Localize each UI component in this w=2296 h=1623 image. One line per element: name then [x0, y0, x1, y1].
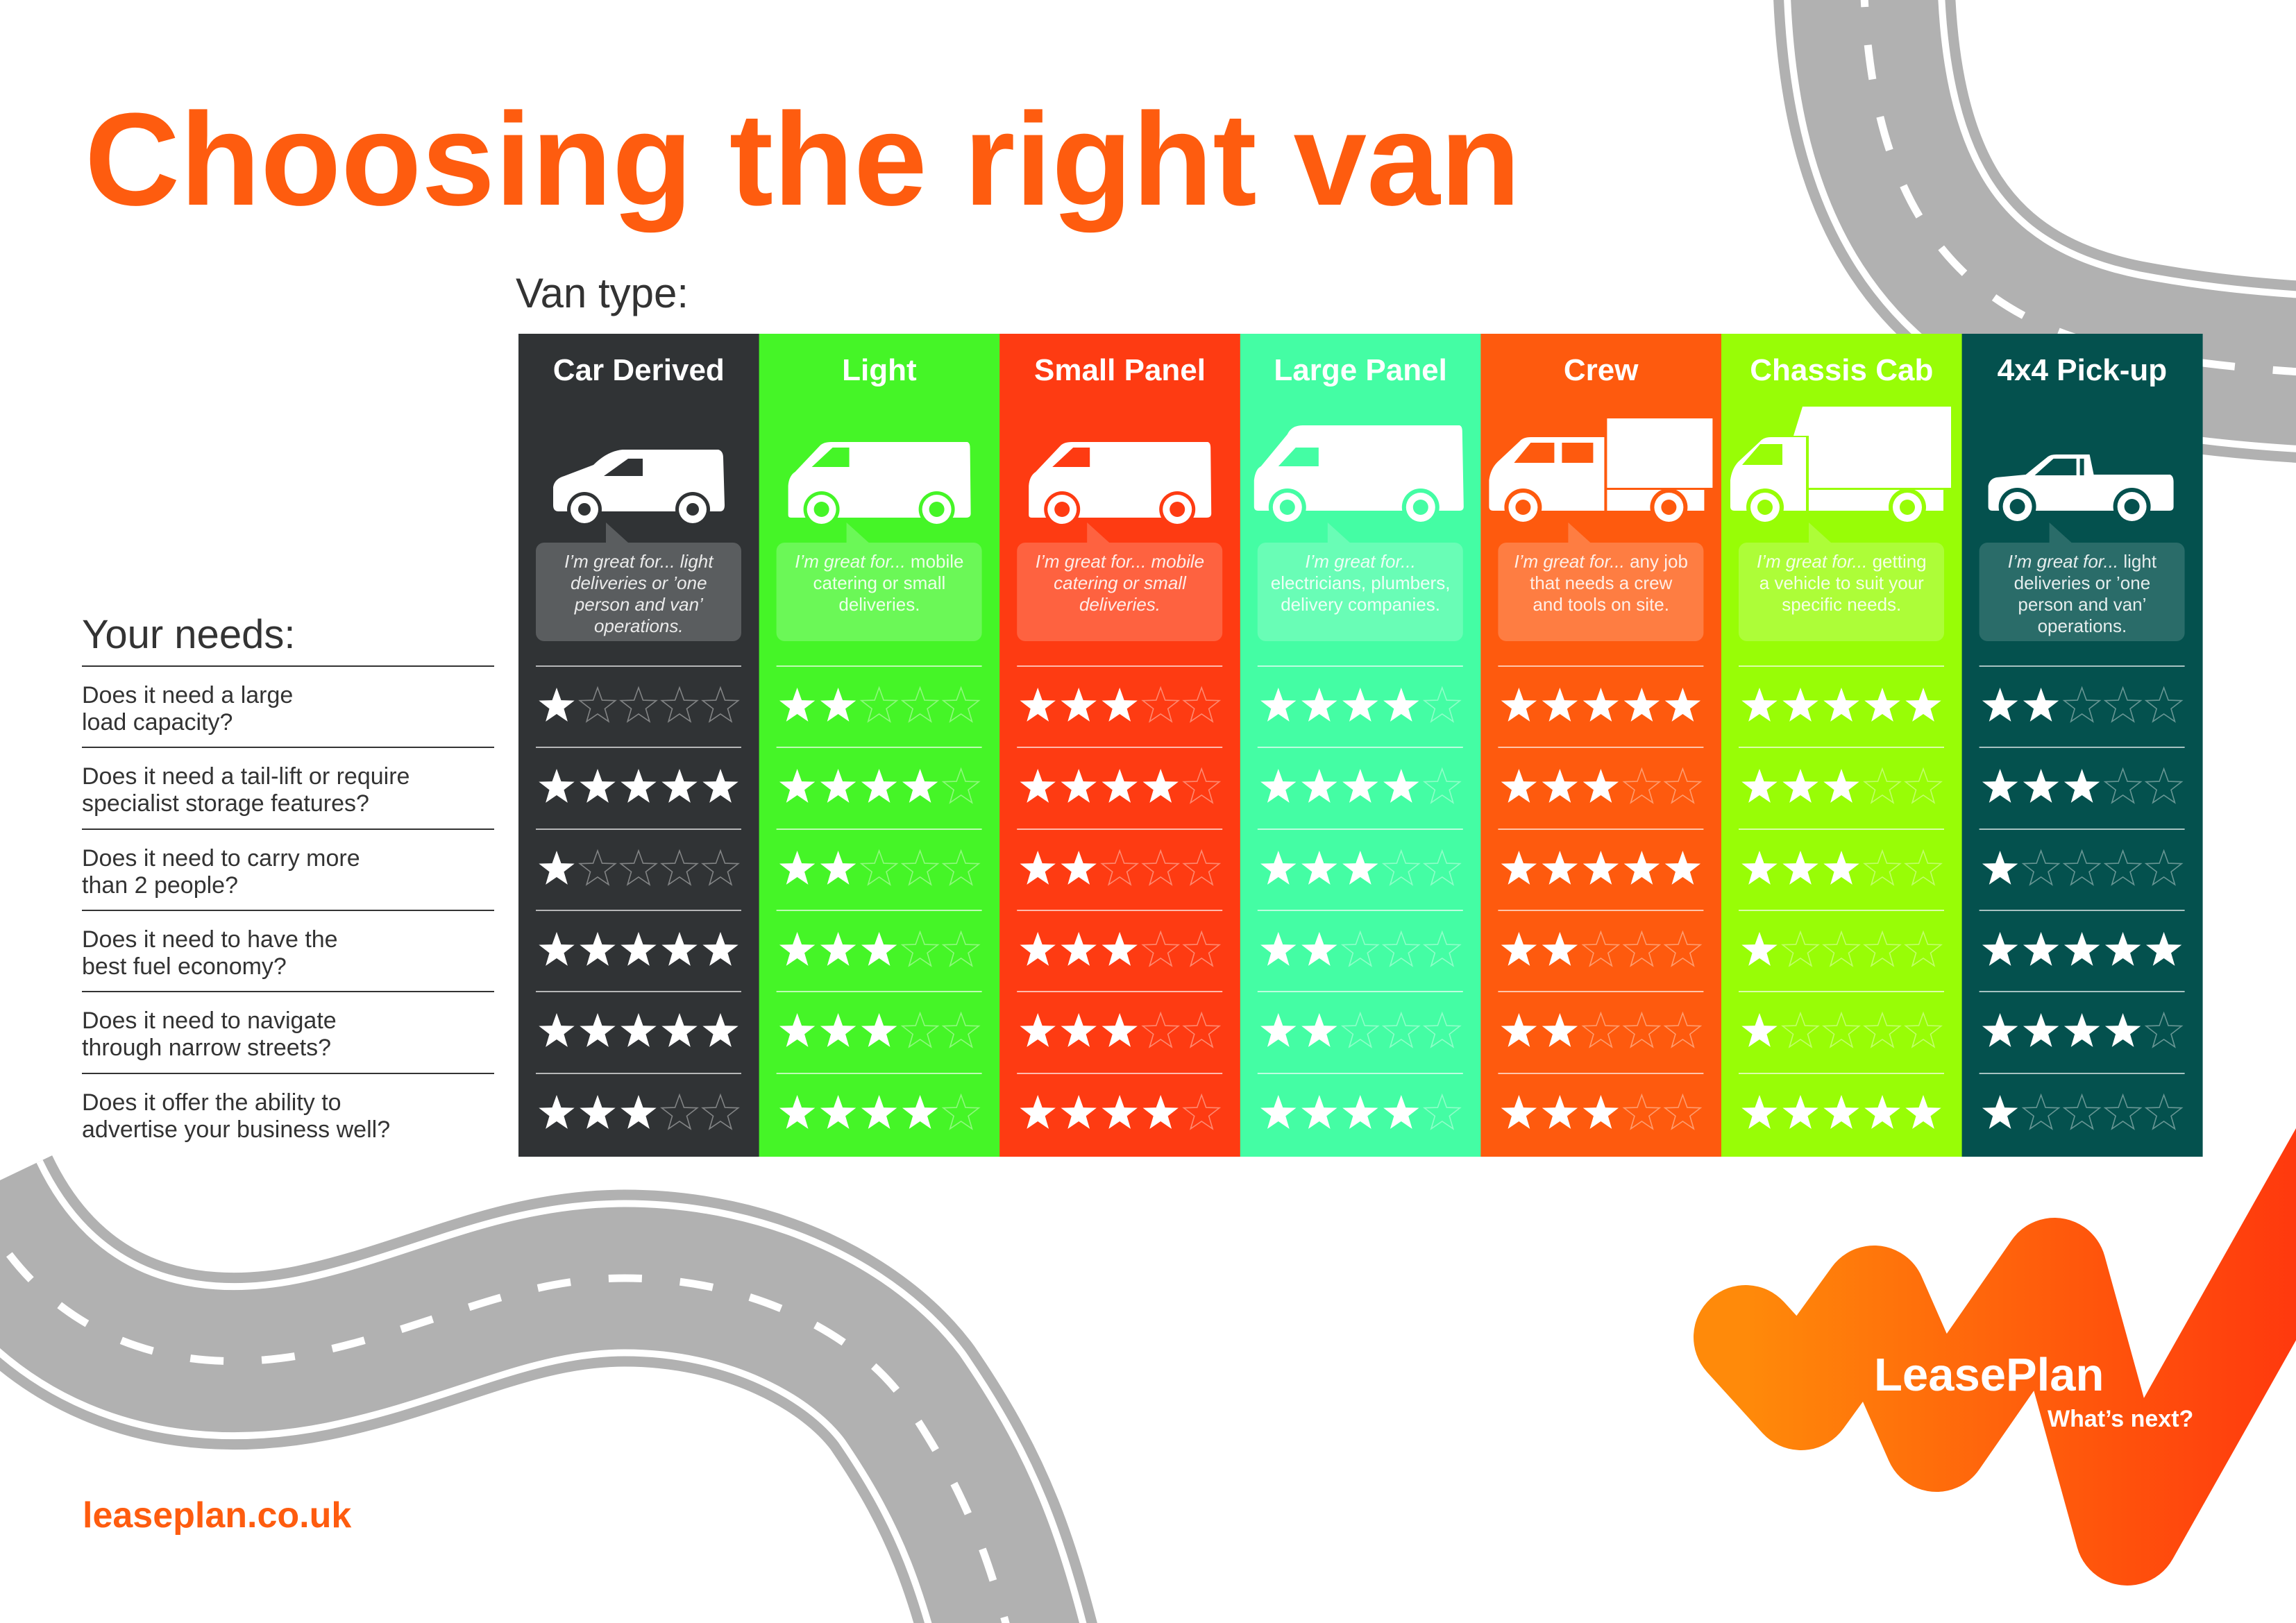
question 1: load capacity? — [82, 709, 233, 736]
callout: small panel: deliveries. — [1079, 594, 1160, 615]
callout: car derived — [536, 522, 741, 641]
panel: chassis cab: Chassis Cab — [1750, 353, 1933, 387]
road: top right — [1864, 0, 2296, 375]
question 5: Does it need to navigate — [82, 1008, 337, 1034]
callout: car derived: I’m great for... light — [564, 551, 713, 572]
panel: chassis cab — [1721, 334, 1962, 1157]
callout: light: I’m great for... mobile — [795, 551, 964, 572]
needs list — [82, 666, 494, 1143]
panel: large panel — [1240, 334, 1481, 1157]
icon: logo ribbon — [1746, 1096, 2296, 1533]
panel: large panel: Large Panel — [1274, 353, 1447, 387]
callout: pick-up: person and van’ — [2018, 594, 2146, 615]
panel: small panel: Small Panel — [1034, 353, 1206, 387]
logo: leaseplan — [1746, 1096, 2296, 1533]
callout: chassis cab: a vehicle to suit your — [1759, 572, 1924, 593]
icon: crew van — [1489, 418, 1712, 526]
panel: 4x4 pick-up — [1962, 334, 2203, 1157]
ratings: light — [779, 688, 979, 1129]
logo: leaseplan: LeasePlan — [1874, 1349, 2104, 1401]
callout: light: catering or small — [813, 572, 945, 593]
website url: leaseplan.co.uk — [83, 1495, 351, 1536]
callout: crew: that needs a crew — [1530, 572, 1673, 593]
callout: small panel: catering or small — [1054, 572, 1187, 593]
question 2: Does it need a tail-lift or require — [82, 763, 410, 790]
icon: car derived van — [553, 450, 725, 527]
callout: car derived: operations. — [594, 615, 684, 636]
question 6: Does it offer the ability to — [82, 1089, 341, 1116]
callout: light — [777, 522, 982, 641]
panel: 4x4 pick-up: 4x4 Pick-up — [1998, 353, 2167, 387]
question 3: Does it need to carry more — [82, 845, 360, 872]
question 1: Does it need a large — [82, 682, 293, 708]
callout: pick-up: operations. — [2038, 615, 2127, 636]
callout: small panel: I’m great for... mobile — [1036, 551, 1204, 572]
panel: crew: Crew — [1564, 353, 1639, 387]
question 3: than 2 people? — [82, 872, 238, 899]
callout: pick-up: I’m great for... light — [2008, 551, 2156, 572]
callout: crew: I’m great for... any job — [1514, 551, 1688, 572]
callout: pick-up — [1980, 522, 2185, 641]
logo: leaseplan: What’s next? — [2048, 1406, 2193, 1432]
question 4: Does it need to have the — [82, 926, 338, 953]
ratings: chassis cab — [1741, 688, 1941, 1129]
callout: small panel — [1017, 522, 1222, 641]
road: bottom left — [0, 1193, 1020, 1623]
callout: chassis cab: specific needs. — [1782, 594, 1901, 615]
heading: your needs: Your needs: — [82, 612, 295, 657]
callout: crew: and tools on site. — [1533, 594, 1669, 615]
panel: small panel — [999, 334, 1240, 1157]
panel: car derived: Car Derived — [553, 353, 725, 387]
callout: chassis cab — [1739, 522, 1944, 641]
icon: chassis cab truck — [1730, 407, 1951, 526]
icon: pick-up truck — [1989, 454, 2174, 525]
callout: light: deliveries. — [838, 594, 920, 615]
callout: large panel: I’m great for... — [1305, 551, 1416, 572]
callout: large panel: electricians, plumbers, — [1271, 572, 1450, 593]
callout: chassis cab: I’m great for... getting — [1757, 551, 1927, 572]
callout: car derived: person and van’ — [574, 594, 704, 615]
ratings: large panel — [1260, 688, 1460, 1129]
heading: van type: Van type: — [516, 270, 689, 316]
panel: light: Light — [842, 353, 917, 387]
ratings: crew — [1501, 688, 1700, 1129]
callout: pick-up: deliveries or ’one — [2014, 572, 2150, 593]
panel: crew — [1480, 334, 1721, 1157]
callout: crew — [1498, 522, 1703, 641]
ratings: car derived — [539, 688, 738, 1129]
panel: light — [759, 334, 1000, 1157]
question 2: specialist storage features? — [82, 790, 369, 817]
question 6: advertise your business well? — [82, 1116, 390, 1143]
callout: large panel — [1258, 522, 1463, 641]
question 5: through narrow streets? — [82, 1035, 331, 1061]
ratings: pick-up — [1982, 688, 2181, 1129]
ratings: small panel — [1020, 688, 1219, 1129]
title: Choosing the right van — [85, 86, 1521, 233]
callout: car derived: deliveries or ’one — [571, 572, 707, 593]
icon: large panel van — [1254, 425, 1464, 526]
question 4: best fuel economy? — [82, 953, 287, 980]
callout: large panel: delivery companies. — [1281, 594, 1440, 615]
panel: car derived — [518, 334, 759, 1157]
icon: small panel van — [1029, 442, 1211, 527]
icon: light van — [788, 442, 971, 527]
